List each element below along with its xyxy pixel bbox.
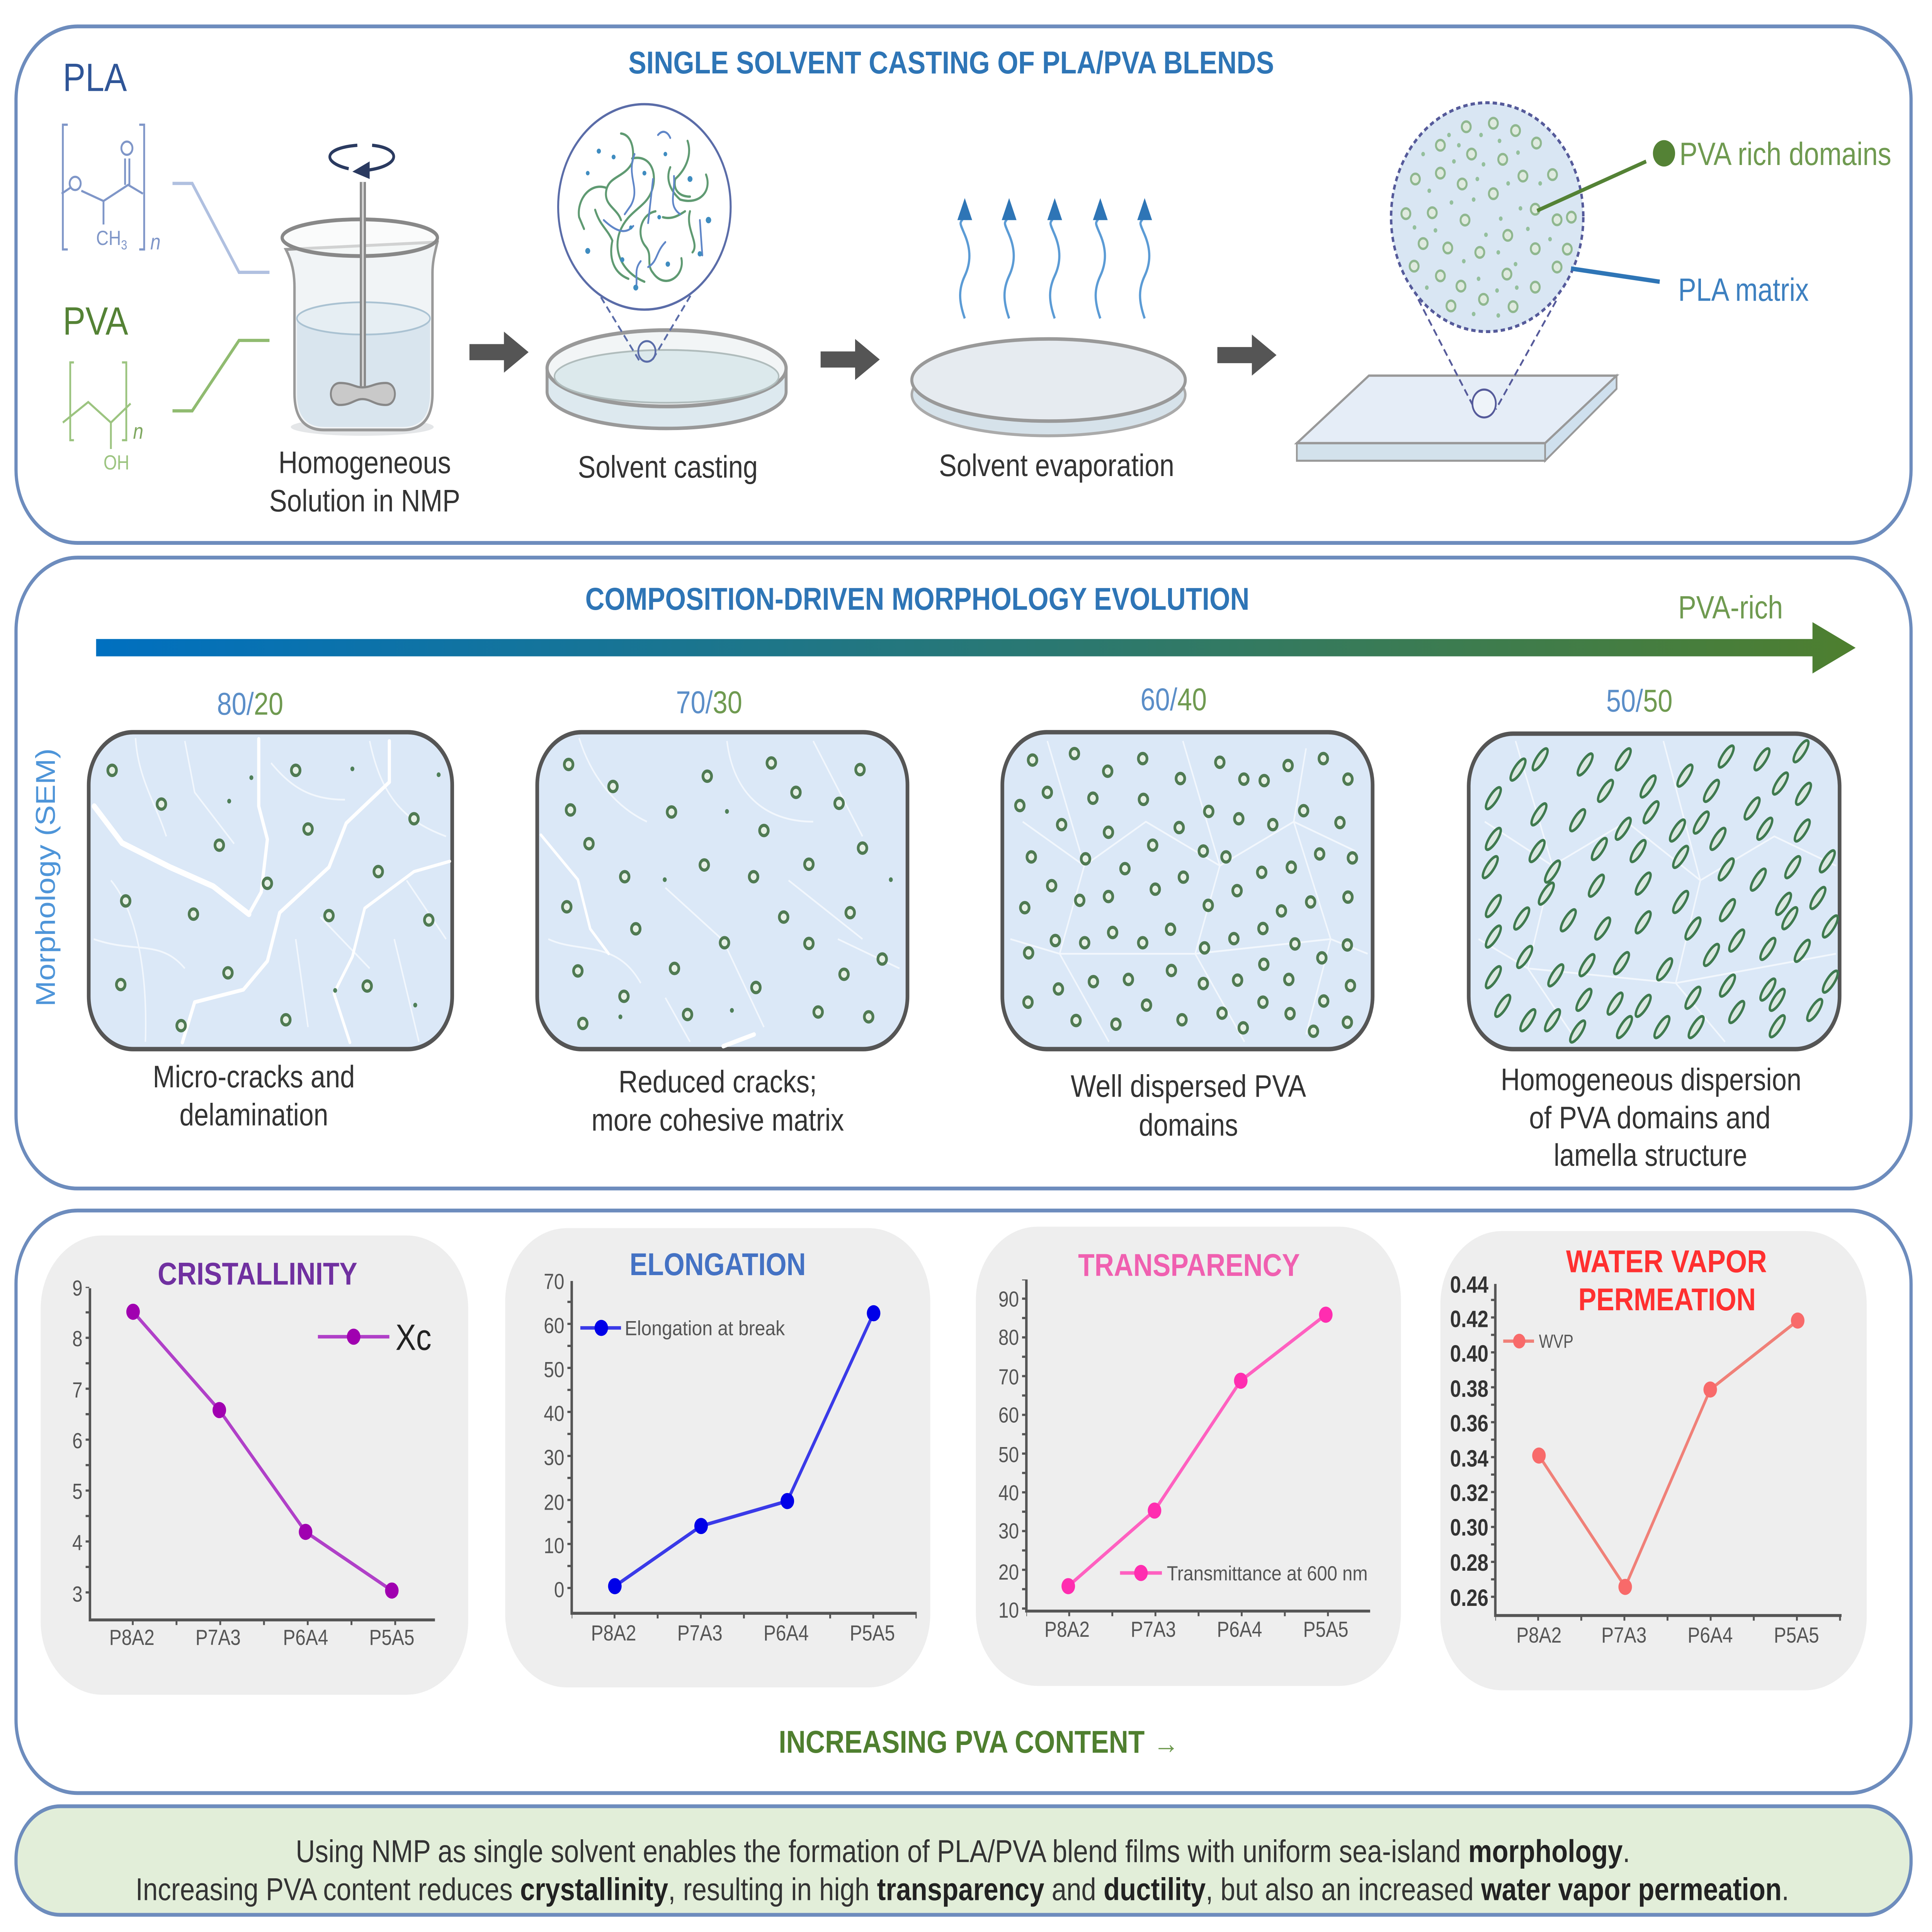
caption: 50/50: of PVA domains and [1529,1100,1770,1135]
label: homogeneous solution: Homogeneous [279,445,451,480]
chart title: water vapor permeation: WATER VAPOR [1566,1244,1767,1279]
heading: increasing PVA content: → [1153,1727,1179,1760]
chart: transparency: 50 [998,1442,1019,1467]
connector: PVA to beaker [172,340,269,411]
chart: water vapor permeation: 0.40 [1450,1340,1488,1367]
chemical structure: PLA: CH [96,227,121,250]
arrow: gradient composition [96,622,1855,673]
chart: water vapor permeation [1440,1231,1867,1690]
caption: 60/40: Well dispersed PVA [1071,1068,1306,1104]
chemical structure: PLA [61,125,161,255]
chart title: water vapor permeation: PERMEATION [1578,1282,1756,1317]
chart: elongation: 20 [544,1490,564,1515]
chart: crystallinity: P7A3 [196,1625,241,1650]
caption: 60/40: domains [1139,1107,1238,1142]
icon: petri dish with solution [547,330,786,429]
chart: water vapor permeation: 0.42 [1450,1306,1488,1332]
heading: composition-driven morphology evolution: COMPOSITION-DRIVEN MORPHOLOGY EVOLUTION [585,581,1249,616]
SEM image: 70/30 [537,732,908,1049]
chart: crystallinity: 8 [72,1327,83,1351]
label: homogeneous solution: Solution in NMP [269,483,460,518]
chart: elongation [505,1228,930,1687]
icon: magnified sea-island morphology [1391,103,1583,417]
chart: elongation: 10 [544,1534,564,1558]
icon: magnified polymer chains in solution [558,104,731,362]
chart: crystallinity: P6A4 [283,1625,328,1650]
caption: 70/30 [592,1064,844,1137]
chart: crystallinity [41,1235,468,1695]
caption: 50/50: Homogeneous dispersion [1501,1062,1801,1097]
chemical structure: PVA [63,362,143,474]
chart: water vapor permeation: P8A2 [1516,1623,1561,1648]
axis label: morphology: Morphology (SEM) [31,748,61,1007]
legend: Xc: Xc [396,1317,432,1358]
chart: crystallinity: P5A5 [369,1625,415,1650]
legend: transmittance at 600 nm: Transmittance at 600 nm [1167,1562,1368,1585]
connector: PLA to beaker [172,184,269,272]
icon: dried film dish [912,339,1185,436]
chart: crystallinity: 9 [72,1276,83,1301]
panel: morphology evolution [16,558,1911,1189]
callout: PLA matrix: PLA matrix [1678,272,1809,308]
chart: water vapor permeation: 0.26 [1450,1585,1488,1611]
chart: crystallinity: 5 [72,1479,83,1504]
chart: water vapor permeation: 0.32 [1450,1480,1488,1506]
chart title: water vapor permeation [1566,1244,1767,1317]
label: PVA-rich: PVA-rich [1678,590,1783,626]
ratio: 50/50: 50/50 [1606,683,1672,718]
chart: water vapor permeation: 0.38 [1450,1376,1488,1402]
caption: 70/30: more cohesive matrix [592,1102,844,1137]
text: conclusion: Increasing PVA content reduces crystallinity, resulting in high transparency and ductility, but also an increased water vapor permeation. [136,1872,1789,1907]
chart: water vapor permeation: 0.30 [1450,1514,1488,1541]
chart: crystallinity: 4 [72,1531,83,1555]
chart: transparency: 90 [998,1287,1019,1312]
caption: 80/20: delamination [179,1097,328,1132]
chart: transparency: 20 [998,1560,1019,1585]
panel: single solvent casting [16,26,1911,543]
label: PLA: PLA [63,55,127,100]
chart: transparency: 70 [998,1365,1019,1389]
arrow: step 2 [821,339,880,380]
legend: WVP: WVP [1539,1330,1573,1352]
chart: elongation: P5A5 [850,1621,895,1645]
caption: 60/40 [1071,1068,1306,1142]
icon: cast film slab [1297,376,1617,461]
callout: PVA rich domains: PVA rich domains [1679,136,1891,172]
chart: transparency [976,1227,1401,1686]
chart: transparency: P5A5 [1303,1617,1349,1642]
chart title: elongation: ELONGATION [629,1247,806,1282]
text: conclusion [136,1833,1789,1907]
legend: WVP [1503,1330,1573,1352]
SEM image: 60/40 [1002,732,1372,1049]
ratio: 70/30: 70/30 [676,685,742,720]
chart: elongation: 50 [544,1357,564,1382]
chart: crystallinity: 6 [72,1429,83,1453]
chart: crystallinity: 3 [72,1582,83,1607]
chart: elongation: P6A4 [764,1621,809,1645]
chart: transparency: P7A3 [1131,1617,1176,1642]
panel: properties [16,1211,1911,1793]
heading: increasing PVA content: INCREASING PVA CONTENT [779,1724,1145,1759]
label: solvent casting: Solvent casting [578,449,758,484]
callout: PVA rich domains [1537,136,1891,211]
chemical structure: PVA: n [133,419,143,444]
ratio: 80/20: 80/20 [217,686,283,721]
label: homogeneous solution [269,445,460,518]
chart title: transparency: TRANSPARENCY [1078,1247,1300,1282]
chart: elongation: 0 [554,1578,564,1602]
caption: 80/20 [153,1059,355,1132]
chart: water vapor permeation: 0.36 [1450,1410,1488,1436]
panel: conclusion [16,1806,1911,1915]
legend: Xc [318,1317,432,1358]
chart: elongation: 70 [544,1269,564,1294]
chart: elongation: 40 [544,1401,564,1426]
chart: water vapor permeation: 0.28 [1450,1549,1488,1576]
chemical structure: PVA: OH [104,452,129,474]
caption: 70/30: Reduced cracks; [619,1064,817,1099]
chart: elongation: 30 [544,1446,564,1470]
chart: water vapor permeation: P5A5 [1774,1623,1819,1648]
chemical structure: PLA: 3 [121,237,127,252]
text: conclusion: Using NMP as single solvent enables the formation of PLA/PVA blend films with uniform sea-island morphology. [296,1833,1630,1869]
callout: PLA matrix [1571,269,1809,308]
arrow: step 3 [1218,335,1277,376]
chart: water vapor permeation: P6A4 [1688,1623,1733,1648]
chart: transparency: 30 [998,1519,1019,1544]
caption: 80/20: Micro-cracks and [153,1059,355,1094]
label: solvent evaporation: Solvent evaporation [939,448,1174,483]
chart: water vapor permeation: P7A3 [1601,1623,1646,1648]
chemical structure: PLA: n [150,230,161,255]
SEM image: 80/20 [89,732,452,1049]
label: PVA: PVA [63,299,128,344]
chart: transparency: 40 [998,1481,1019,1505]
chart: crystallinity: 7 [72,1378,83,1403]
chart: crystallinity: P8A2 [109,1625,155,1650]
chart: transparency: 60 [998,1403,1019,1428]
legend: elongation at break: Elongation at break [625,1317,785,1340]
caption: 50/50: lamella structure [1554,1137,1747,1172]
chart: transparency: P8A2 [1044,1617,1090,1642]
chart: elongation: P7A3 [677,1621,723,1645]
icon: beaker with stirrer [282,145,437,436]
chart: elongation: P8A2 [591,1621,636,1645]
arrow: step 1 [469,332,529,373]
chart: water vapor permeation: 0.34 [1450,1445,1488,1471]
chart title: crystallinity: CRISTALLINITY [158,1256,357,1291]
ratio: 60/40: 60/40 [1141,682,1207,717]
caption: 50/50 [1501,1062,1801,1172]
heading: single solvent casting: SINGLE SOLVENT CASTING OF PLA/PVA BLENDS [628,45,1274,80]
chart: elongation: 60 [544,1313,564,1338]
chart: transparency: P6A4 [1217,1617,1262,1642]
chart: transparency: 80 [998,1325,1019,1350]
chart: water vapor permeation: 0.44 [1450,1271,1488,1298]
icon: evaporation arrows [957,198,1152,318]
chart: transparency: 10 [998,1598,1019,1623]
SEM image: 50/50 [1469,734,1840,1049]
